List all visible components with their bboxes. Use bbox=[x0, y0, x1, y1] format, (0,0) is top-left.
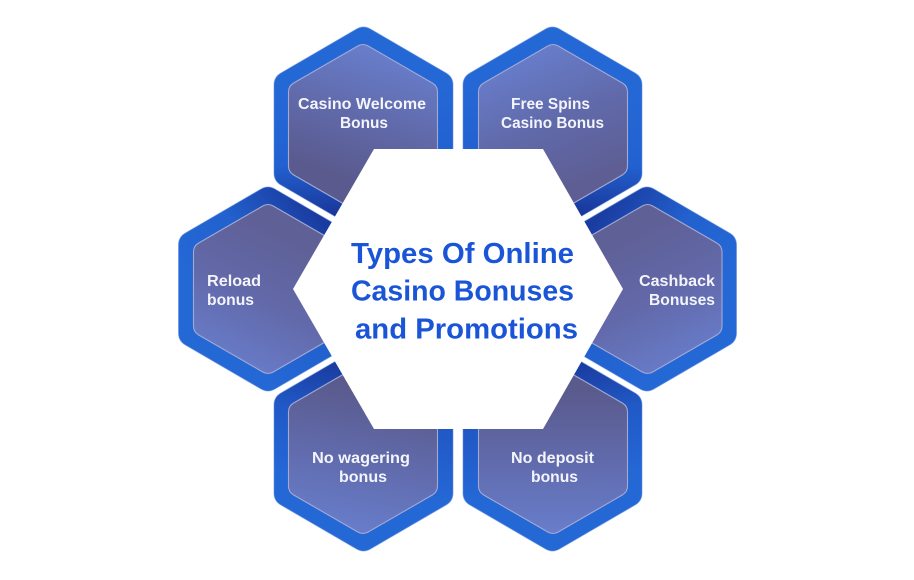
hexagon: Casino Welcome Bonus bbox=[274, 27, 453, 231]
label: Free Spins Casino Bonus bbox=[501, 96, 604, 132]
hexagon: Cashback Bonuses bbox=[558, 187, 736, 391]
label: Free Spins Casino Bonus: Casino Bonus bbox=[501, 115, 604, 132]
label: Reload bonus: bonus bbox=[207, 292, 254, 309]
label: Free Spins Casino Bonus: Free Spins bbox=[511, 96, 590, 113]
hexagon: Free Spins Casino Bonus bbox=[463, 27, 642, 231]
hexagon: No deposit bonus bbox=[463, 347, 642, 551]
title: and Promotions bbox=[355, 314, 578, 346]
label: Casino Welcome Bonus: Casino Welcome bbox=[298, 96, 426, 113]
label: Cashback Bonuses: Bonuses bbox=[649, 292, 715, 309]
center white hexagon bbox=[293, 149, 623, 429]
label: Casino Welcome Bonus bbox=[298, 96, 426, 132]
label: Cashback Bonuses: Cashback bbox=[639, 273, 715, 290]
label: Reload bonus: Reload bbox=[207, 273, 261, 290]
hexagon: No wagering bonus bbox=[274, 347, 453, 551]
label: No deposit bonus: bonus bbox=[531, 469, 578, 486]
label: No deposit bonus: No deposit bbox=[511, 450, 594, 467]
label: Reload bonus bbox=[207, 273, 261, 309]
title: Types Of Online bbox=[351, 238, 574, 270]
label: Casino Welcome Bonus: Bonus bbox=[340, 115, 388, 132]
title bbox=[351, 238, 578, 346]
title: Casino Bonuses bbox=[351, 276, 574, 308]
label: Cashback Bonuses bbox=[639, 273, 715, 309]
label: No deposit bonus bbox=[511, 450, 594, 486]
label: No wagering bonus: bonus bbox=[339, 469, 387, 486]
label: No wagering bonus bbox=[312, 450, 410, 486]
hexagon: Reload bonus bbox=[178, 187, 358, 391]
label: No wagering bonus: No wagering bbox=[312, 450, 410, 467]
